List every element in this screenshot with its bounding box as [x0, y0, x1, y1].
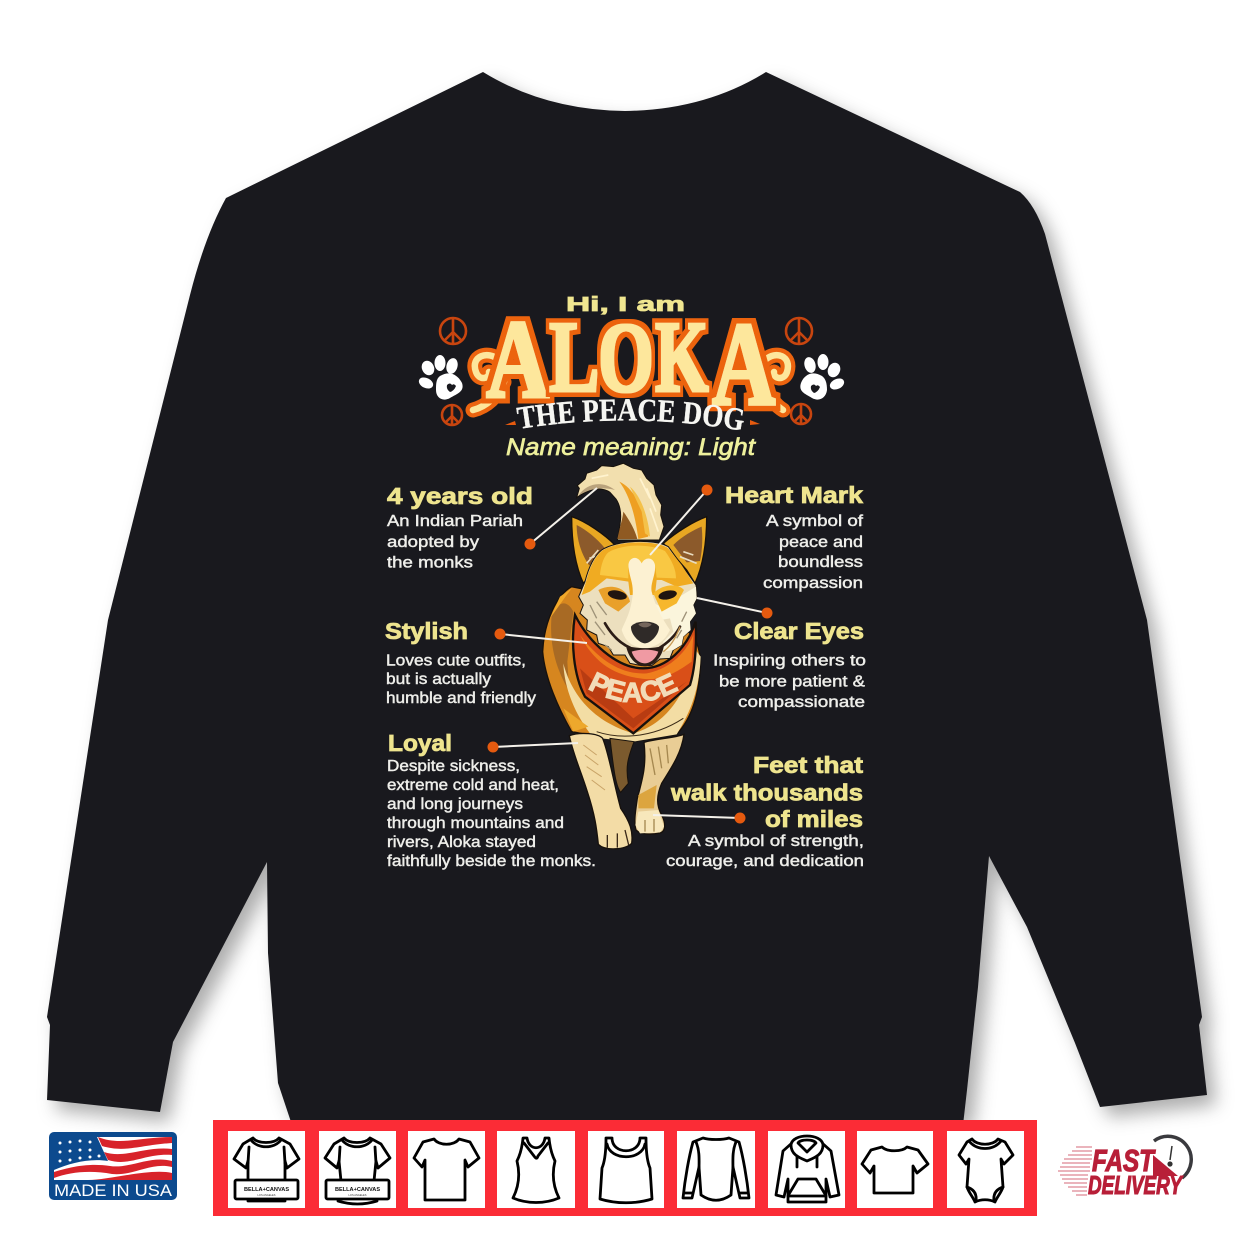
- front leg left: [569, 733, 632, 849]
- icon: unisex tee: [228, 1131, 305, 1208]
- icon: peace sign top right: [786, 318, 812, 344]
- description: [386, 652, 536, 707]
- icon: long sleeve: [677, 1131, 755, 1208]
- heading: walk thousands: [670, 780, 863, 806]
- callout: heart mark: [650, 482, 864, 592]
- leader line: [530, 488, 597, 544]
- icon: unisex tee: LOS ANGELES: [257, 1193, 276, 1197]
- marker dot: [702, 484, 712, 496]
- leader line: [493, 743, 578, 747]
- ALOKA wordmark: L: [549, 301, 600, 414]
- description: [387, 513, 523, 572]
- body: [543, 587, 701, 742]
- description: humble and friendly: [386, 690, 536, 707]
- heading: Clear Eyes: [734, 618, 864, 644]
- hind leg shadow: [610, 738, 634, 792]
- greeting: Hi, I am: [566, 294, 685, 316]
- callout: feet: [653, 752, 864, 870]
- description: Inspiring others to: [713, 652, 866, 670]
- description: compassionate: [738, 694, 865, 711]
- leader line: [650, 490, 707, 555]
- description: the monks: [387, 554, 473, 572]
- icon: tank top: [588, 1131, 664, 1208]
- icon: unisex tee: BELLA+CANVAS: [244, 1187, 289, 1193]
- description: A symbol of strength,: [688, 833, 864, 850]
- icon: crop tee: [857, 1131, 933, 1208]
- icon: women's tee: LOS ANGELES: [348, 1193, 367, 1197]
- heading: Loyal: [388, 730, 452, 756]
- heading: Heart Mark: [725, 482, 864, 508]
- description: [713, 652, 866, 711]
- description: A symbol of: [766, 513, 864, 530]
- tail: [577, 463, 664, 540]
- description: Despite sickness,: [387, 758, 520, 775]
- description: courage, and dedication: [666, 853, 864, 870]
- marker dot: [762, 608, 772, 618]
- heading: of miles: [765, 806, 863, 832]
- badge: fast delivery: [1058, 1136, 1191, 1200]
- ALOKA wordmark: O: [598, 301, 654, 413]
- icon: peace sign lower right: [791, 404, 811, 424]
- speed lines: [1058, 1147, 1092, 1195]
- ALOKA wordmark: A: [712, 297, 776, 430]
- heading: 4 years old: [387, 483, 533, 509]
- ALOKA wordmark: K: [655, 300, 709, 413]
- heading: [670, 752, 863, 832]
- gauge: [1153, 1136, 1191, 1178]
- description: [666, 833, 864, 870]
- subtitle arc: THE PEACE DOG: [516, 399, 744, 430]
- callout: 4 years old: [387, 483, 597, 572]
- icon: women's tee: [319, 1131, 396, 1208]
- icon: racerback tank: [497, 1131, 575, 1208]
- ALOKA wordmark: [473, 297, 788, 430]
- flag: [54, 1137, 172, 1180]
- description: faithfully beside the monks.: [387, 853, 596, 870]
- heart blaze: [622, 558, 670, 648]
- tongue: [632, 650, 658, 663]
- icon: right paw: [800, 354, 846, 400]
- badge: made in USA: [49, 1132, 177, 1200]
- callout: stylish: [385, 618, 587, 707]
- icon: classic tee: [408, 1131, 485, 1208]
- icon: women's tee: BELLA+CANVAS: [335, 1187, 380, 1193]
- leader line: [697, 598, 767, 613]
- product type strip: [213, 1120, 1037, 1216]
- description: compassion: [763, 575, 863, 592]
- description: An Indian Pariah: [387, 513, 523, 530]
- description: boundless: [778, 554, 863, 571]
- ALOKA wordmark: A: [486, 297, 550, 421]
- icon: hoodie: [768, 1131, 845, 1208]
- name meaning: Name meaning: Light: [506, 434, 756, 461]
- heading: Stylish: [385, 618, 468, 644]
- marker dot: [524, 538, 536, 550]
- marker dot: [494, 628, 506, 640]
- icon: left paw: [417, 355, 463, 400]
- leader line: [500, 634, 587, 643]
- bandana: [572, 611, 697, 735]
- description: [387, 758, 596, 870]
- description: rivers, Aloka stayed: [387, 834, 536, 851]
- delivery label: DELIVERY: [1088, 1170, 1184, 1200]
- badge label: MADE IN USA: [54, 1181, 173, 1200]
- black sweatshirt: [47, 72, 1207, 1125]
- description: but is actually: [386, 671, 491, 688]
- description: through mountains and: [387, 815, 564, 832]
- heading: Feet that: [753, 752, 863, 778]
- description: extreme cold and heat,: [387, 777, 559, 794]
- description: and long journeys: [387, 796, 523, 813]
- fast label: FAST: [1092, 1143, 1156, 1178]
- dog illustration: [542, 462, 708, 850]
- description: adopted by: [387, 534, 479, 551]
- head: [579, 541, 697, 666]
- icon: peace sign lower left: [442, 405, 462, 425]
- subtitle arc: [505, 399, 760, 430]
- mouth: [605, 623, 680, 666]
- description: Loves cute outfits,: [386, 652, 526, 670]
- callout: loyal: [387, 730, 596, 870]
- PEACE lettering: PEACE: [588, 672, 679, 703]
- description: be more patient &: [719, 674, 865, 690]
- callout: clear eyes: [697, 598, 866, 711]
- nose: [631, 622, 659, 643]
- marker dot: [734, 812, 746, 824]
- ears: [572, 517, 707, 583]
- icon: peace sign top left: [440, 318, 466, 344]
- marker dot: [488, 742, 498, 752]
- title block: [418, 294, 844, 461]
- sweatshirt shadow: [56, 82, 1216, 1130]
- description: peace and: [779, 534, 863, 551]
- icon: baby onesie: [947, 1131, 1024, 1208]
- leader line: [653, 815, 740, 818]
- eyes: [607, 589, 628, 601]
- front leg right: [635, 734, 684, 834]
- description: [763, 513, 864, 592]
